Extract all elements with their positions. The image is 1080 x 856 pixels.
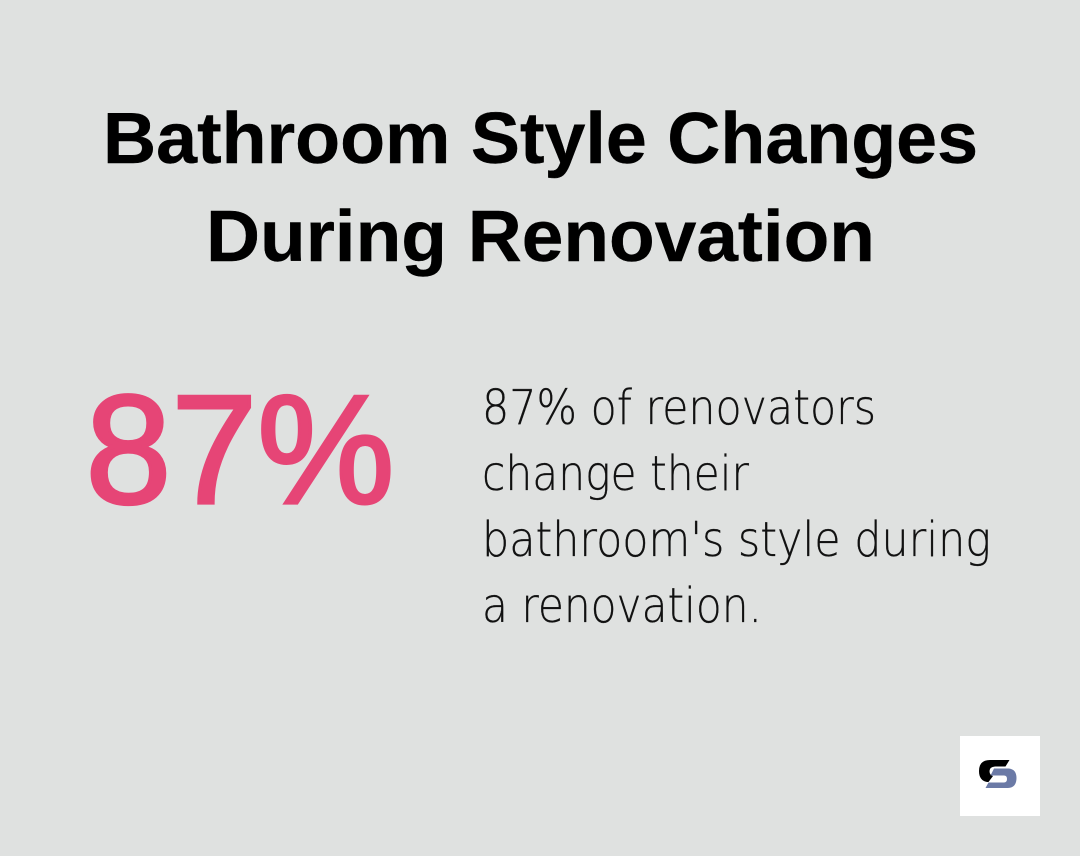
icon: logo mark, black part	[979, 760, 1010, 782]
icon: logo mark, blue part	[986, 768, 1016, 788]
title	[103, 99, 978, 277]
title: During Renovation	[206, 197, 875, 277]
description text: a renovation.	[482, 578, 762, 634]
title: Bathroom Style Changes	[103, 99, 978, 179]
description text: bathroom's style during	[482, 512, 991, 568]
description text: 87% of renovators	[482, 380, 876, 436]
description text: change their	[482, 446, 749, 502]
big statistic: 87%: 87%	[86, 363, 394, 536]
description text	[482, 380, 991, 634]
logo badge	[960, 736, 1040, 816]
